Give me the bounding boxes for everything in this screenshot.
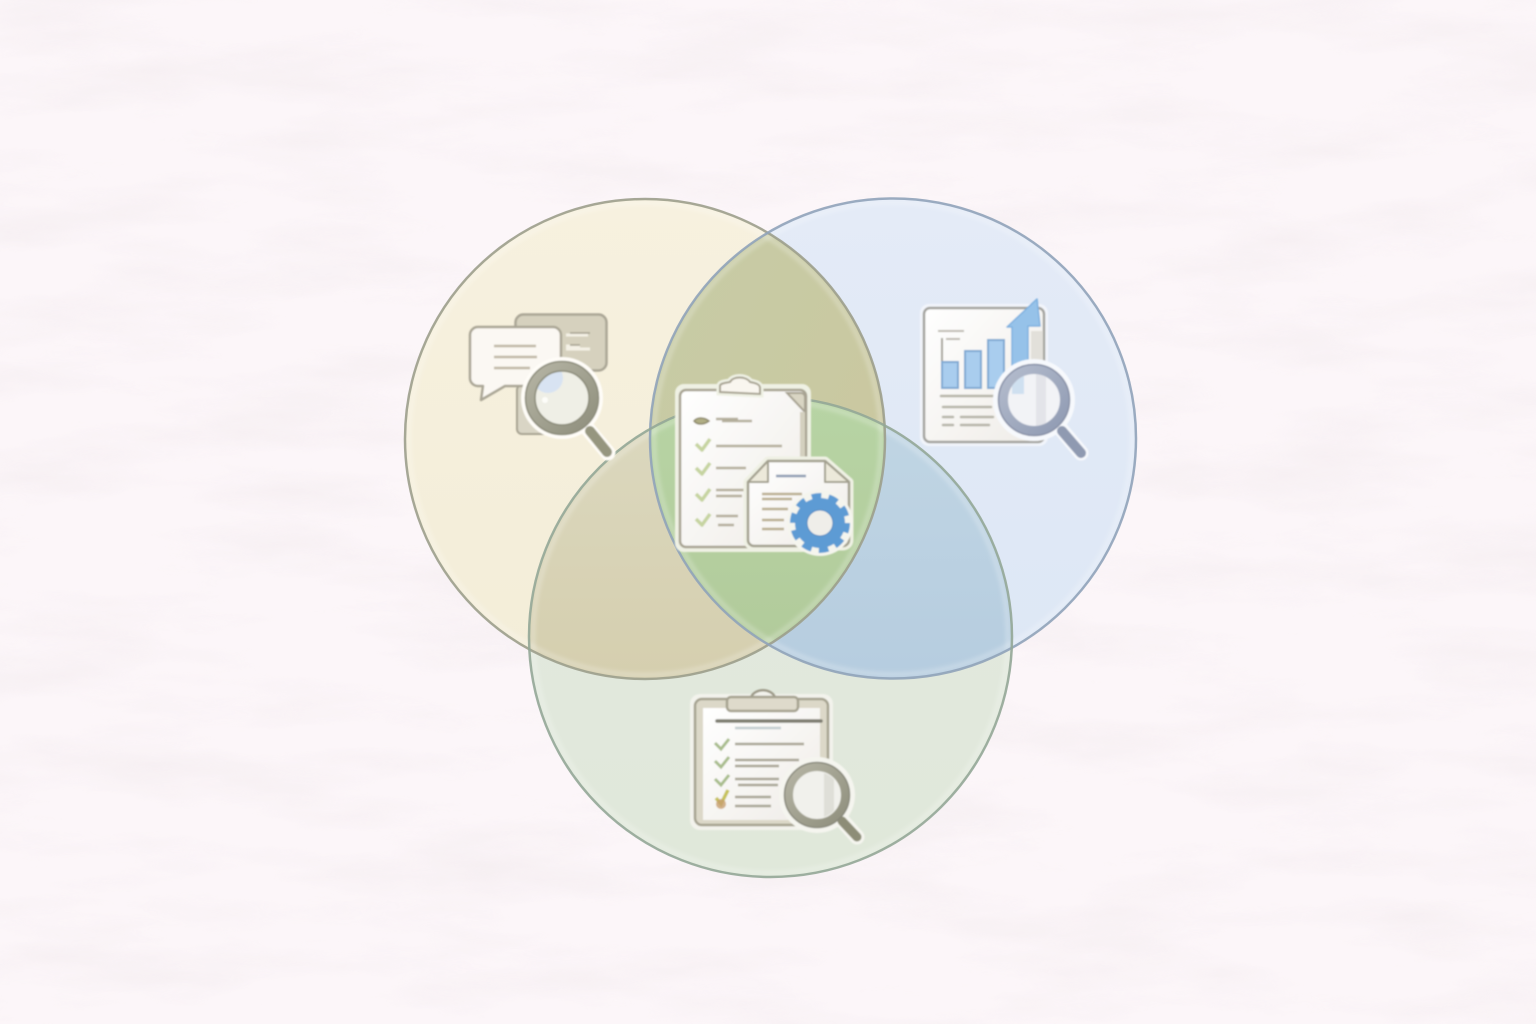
circle: yellow — [405, 199, 885, 679]
check marks — [715, 739, 729, 785]
overlap: yellow and blue — [652, 234, 884, 427]
back speech bubble — [516, 314, 606, 370]
icon: report with bar chart and magnifier — [920, 299, 1081, 453]
checklist lines — [716, 419, 782, 525]
icon: speech bubbles with magnifier — [470, 314, 608, 453]
paper — [703, 708, 820, 820]
back document — [517, 385, 567, 434]
checklist marks — [694, 418, 709, 424]
icon: clipboard checklist with magnifier — [690, 690, 857, 837]
growth arrow — [1007, 299, 1040, 393]
report halo — [920, 304, 1048, 446]
bars — [942, 340, 1004, 388]
magnifier — [993, 359, 1081, 453]
clipboard board — [680, 390, 806, 547]
venn diagram — [405, 198, 1136, 877]
icon: central checklist and settings document — [675, 378, 853, 556]
clipboard halo — [675, 384, 811, 552]
list lines — [735, 744, 804, 806]
front speech bubble — [470, 327, 561, 400]
overlap: blue and green — [771, 428, 1011, 678]
clipboard clip — [720, 378, 760, 394]
circle: blue — [650, 198, 1136, 678]
magnifier — [779, 757, 857, 837]
overlap: all three — [651, 402, 884, 644]
circle: green — [529, 397, 1012, 877]
circle outlines — [405, 198, 1136, 877]
clipboard halo — [690, 694, 833, 830]
inner edge glow — [409, 202, 1132, 873]
settings document — [748, 461, 849, 546]
gear — [787, 490, 853, 556]
clip — [751, 690, 775, 697]
text lines — [941, 396, 1001, 425]
overlap: yellow and green — [530, 431, 766, 678]
magnifier — [521, 357, 608, 453]
report sheet — [924, 308, 1044, 442]
clipboard board — [695, 699, 828, 825]
title lines — [717, 719, 821, 723]
